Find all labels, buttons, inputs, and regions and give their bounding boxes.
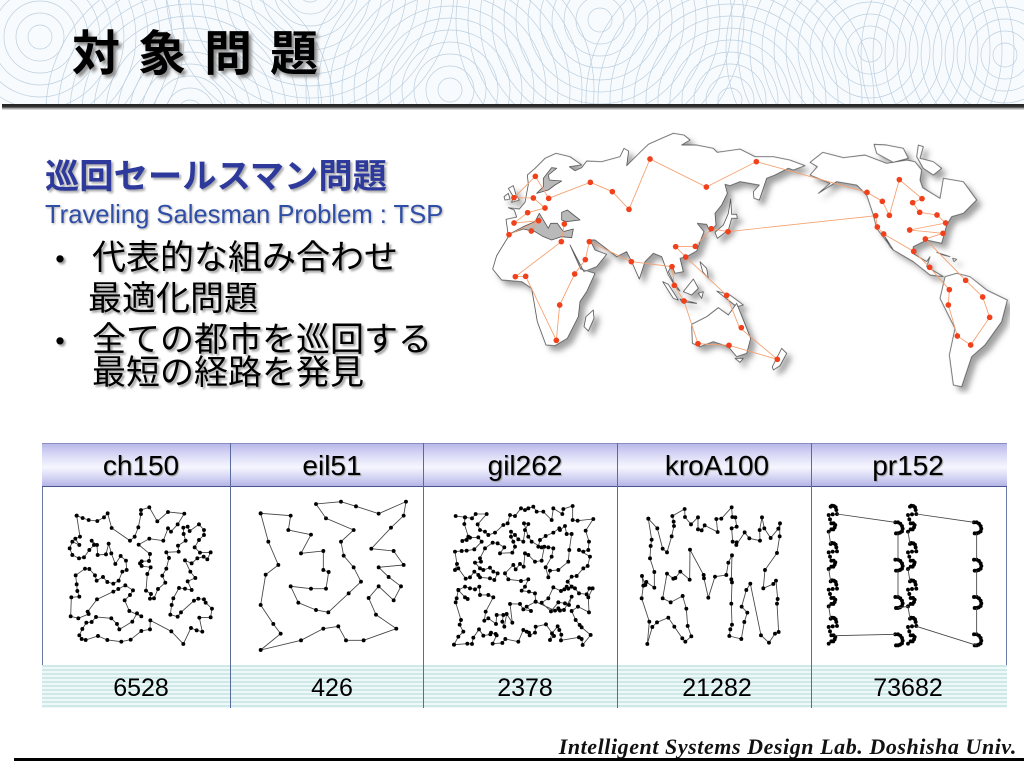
column label: gil262: gil262: [488, 450, 562, 481]
city dots: [506, 156, 992, 362]
table body row: [42, 487, 1007, 665]
column label: kroA100: kroA100: [665, 450, 769, 481]
footer credit: Intelligent Systems Design Lab. Doshisha Univ.: [559, 734, 1017, 759]
column label: ch150: ch150: [103, 450, 179, 481]
subheading: English name: Traveling Salesman Problem : TSP: [45, 201, 443, 229]
tour length: kroA100: 21282: [682, 674, 752, 702]
tour: ch150: [70, 507, 212, 644]
column label: eil51: eil51: [302, 450, 362, 481]
table value row: [42, 665, 1007, 708]
inland seas: [511, 168, 580, 240]
tour length: eil51: 426: [311, 674, 353, 702]
heading: traveling salesman problem (Japanese): 巡回セールスマン問題: [45, 158, 387, 196]
tour: pr152: [829, 506, 981, 645]
bullet 1 continuation: 最適化問題: [88, 280, 258, 318]
bullet 2: 全ての都市を巡回する: [92, 321, 432, 359]
header band with concentric ring pattern: [0, 0, 1024, 104]
world map with TSP route: [492, 132, 1010, 395]
column label: pr152: pr152: [872, 450, 944, 481]
bullet 1: ・: [43, 242, 77, 280]
tour length: pr152: 73682: [873, 674, 943, 702]
header rule: [2, 104, 1024, 110]
tour: kroA100: [642, 507, 780, 644]
bullet 2: ・: [43, 324, 77, 362]
bullet list: [43, 239, 432, 392]
bullet 2 continuation: 最短の経路を発見: [92, 354, 364, 392]
tour length: ch150: 6528: [113, 674, 169, 702]
bullet 1: 代表的な組み合わせ: [92, 239, 398, 277]
title: 対象問題: [72, 28, 336, 81]
tour: gil262: [454, 506, 593, 645]
table header row: [42, 443, 1007, 487]
footer rule: [14, 758, 1024, 761]
route lines: [509, 159, 990, 359]
tour: eil51: [261, 502, 406, 650]
land masses: [493, 133, 1007, 387]
tour length: gil262: 2378: [497, 674, 553, 702]
